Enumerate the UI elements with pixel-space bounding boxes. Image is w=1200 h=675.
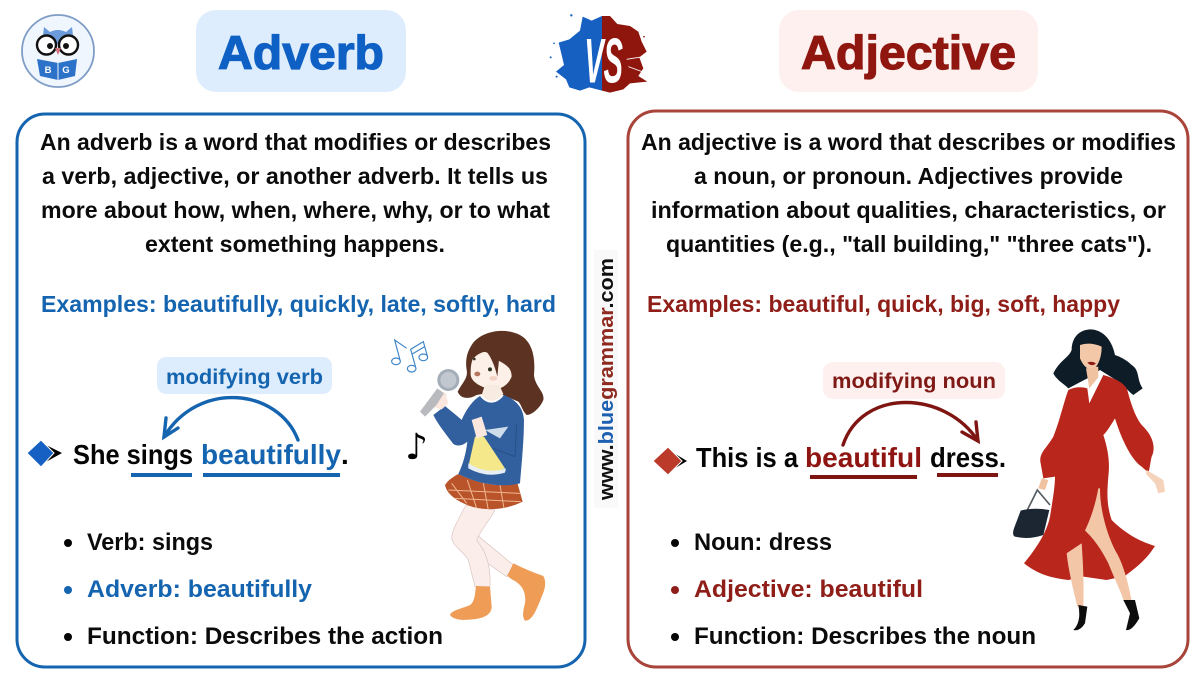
woman handbag: [1027, 490, 1050, 510]
example sentence: [73, 439, 349, 477]
adverb bullet list: [64, 529, 443, 650]
icon: VS splatter: VS: [584, 27, 623, 97]
example sentence: beautiful: [805, 442, 922, 473]
adverb bullet list: Verb: sings: [87, 529, 213, 556]
adjective definition text: a noun, or pronoun. Adjectives provide: [694, 163, 1123, 189]
icon: owl logo: G: [62, 65, 70, 76]
example sentence: [696, 442, 1006, 479]
woman hair: [1053, 329, 1143, 395]
adverb definition text: more about how, when, where, why, or to what: [41, 197, 550, 223]
girl legs: [468, 533, 513, 577]
example sentence: dress.: [930, 442, 1006, 473]
icon: VS splatter: [550, 14, 653, 97]
girl hair: [458, 331, 544, 415]
heading: Adjective: [779, 10, 1038, 92]
adjective definition text: quantities (e.g., "tall building," "three cats").: [666, 231, 1152, 257]
heading: Adverb: Adverb: [218, 26, 384, 79]
adjective bullet list: [671, 529, 1036, 650]
adjective bullet list: Noun: dress: [694, 529, 832, 556]
adjective bullet list: Function: Describes the noun: [694, 623, 1036, 650]
adjective definition text: [641, 129, 1176, 257]
adverb definition text: [40, 129, 551, 257]
heading: Adverb: [196, 10, 406, 92]
panel: adverb: [17, 114, 585, 667]
girl microphone: [420, 388, 447, 417]
illustration: woman in red dress: [1013, 329, 1165, 630]
adverb definition text: An adverb is a word that modifies or describes: [40, 129, 551, 155]
icon: owl logo: [22, 15, 94, 87]
watermark: bluegrammar url: www.bluegrammar.com: [596, 258, 618, 501]
woman dress: [1024, 375, 1155, 580]
adjective examples: Examples: beautiful, quick, big, soft, happy: [647, 291, 1120, 317]
adjective definition text: information about qualities, characteristics, or: [651, 197, 1166, 223]
adjective bullet list: Adjective: beautiful: [694, 576, 923, 603]
icon: owl logo: B: [45, 65, 52, 76]
adverb definition text: a verb, adjective, or another adverb. It tells us: [42, 163, 548, 189]
label: modifying noun: modifying noun: [832, 369, 996, 393]
example sentence: This is a: [696, 442, 798, 473]
label: modifying noun: [823, 362, 1005, 399]
adverb definition text: extent something happens.: [145, 231, 445, 257]
woman face: [1080, 344, 1102, 370]
adverb bullet list: Function: Describes the action: [87, 623, 443, 650]
icon: blue music notes: [392, 340, 428, 372]
example sentence: beautifully: [201, 439, 341, 470]
heading: Adjective: Adjective: [801, 26, 1016, 79]
arrow: beautiful to dress: [843, 402, 978, 445]
adverb examples: Examples: beautifully, quickly, late, softly, hard: [41, 291, 556, 317]
adjective definition text: An adjective is a word that describes or modifies: [641, 129, 1176, 155]
example sentence: She sings: [73, 439, 193, 470]
woman shoes: [1073, 605, 1087, 630]
woman hands: [1146, 470, 1165, 493]
icon: blue diamond bullet: [27, 440, 62, 467]
adverb bullet list: Adverb: beautifully: [87, 576, 313, 603]
girl skirt: [445, 474, 523, 509]
label: modifying verb: modifying verb: [166, 365, 323, 389]
icon: black music note: ♪: [405, 427, 428, 468]
arrow: beautifully to sings: [164, 398, 298, 440]
illustration: girl singing: [420, 331, 545, 621]
woman legs: [1067, 543, 1084, 607]
label: modifying verb: [157, 357, 332, 394]
example sentence: .: [341, 439, 349, 470]
icon: red diamond bullet: [653, 447, 687, 475]
panel: adjective: [628, 111, 1188, 667]
girl socks and shoes: [450, 586, 492, 620]
girl sweater: [433, 395, 524, 485]
girl face: [471, 352, 512, 389]
